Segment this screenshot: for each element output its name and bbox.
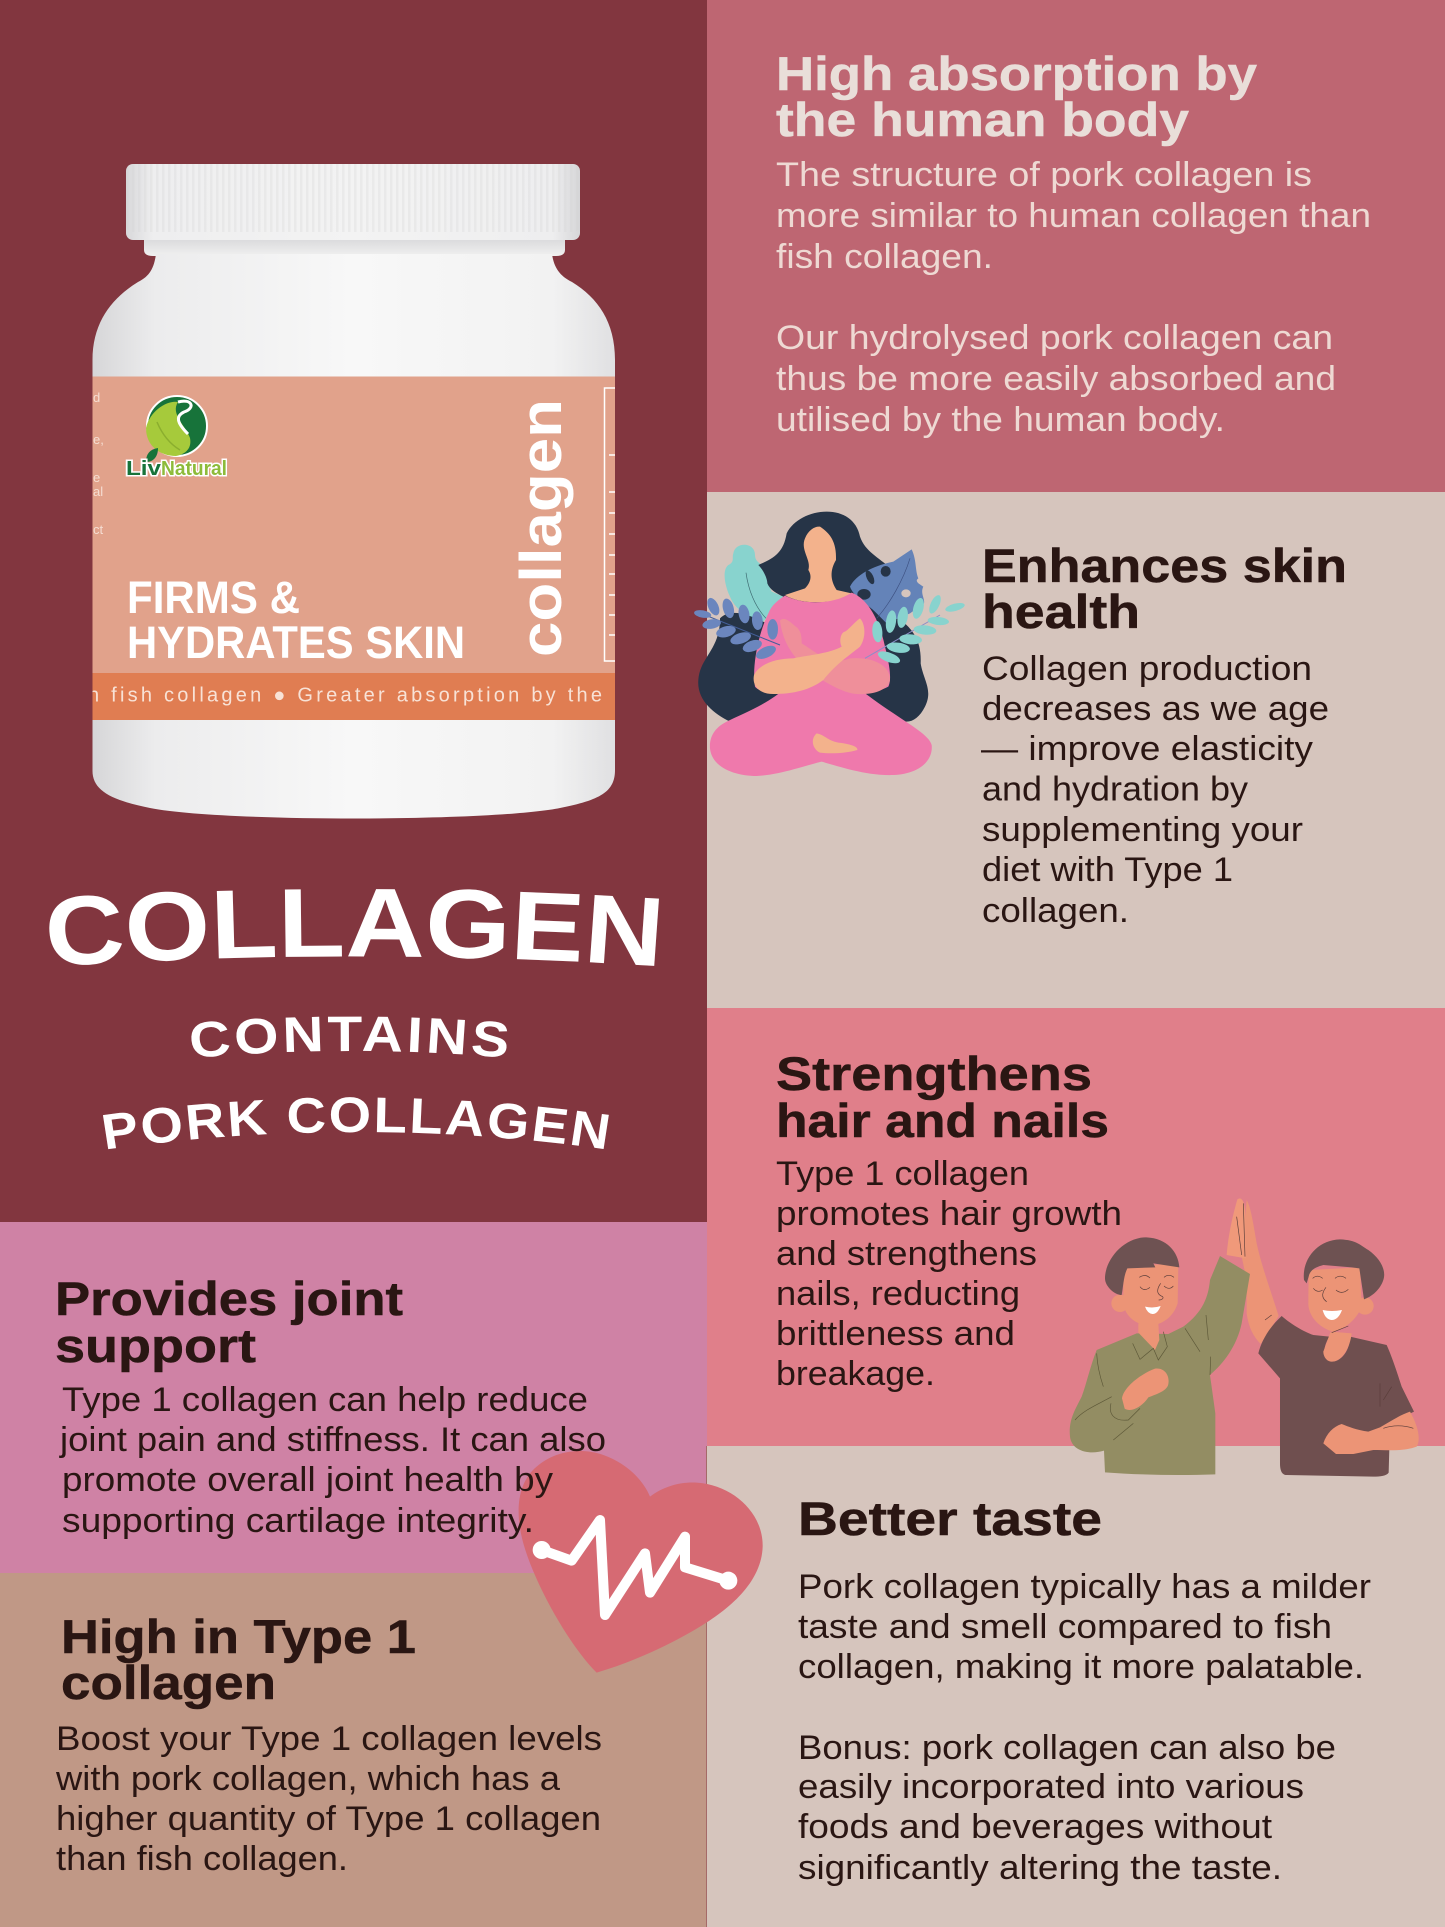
text: high absorption: The structure of pork collagen is — [776, 156, 1312, 194]
heading: hair and nails: Strengthens — [776, 1047, 1092, 1100]
text: hair and nails — [776, 1155, 1122, 1393]
legs — [710, 687, 932, 776]
text: better taste: Bonus: pork collagen can also be — [798, 1729, 1336, 1767]
text: better taste: significantly altering the taste. — [798, 1849, 1282, 1887]
clipped side label text: ct — [93, 522, 104, 537]
text: better taste — [798, 1568, 1371, 1887]
face and neck — [785, 527, 852, 602]
panel: better taste background — [707, 1446, 1445, 1927]
text: better taste: easily incorporated into various — [798, 1768, 1304, 1806]
heading: skin health: health — [982, 585, 1140, 638]
clipped side label text: e — [93, 470, 100, 485]
panel: absorption background — [707, 0, 1445, 492]
panel: product background — [0, 0, 707, 1222]
title: COLLAGEN: COLLAGEN — [49, 889, 659, 966]
logo: LivNatural — [126, 396, 227, 480]
blue sprig — [693, 596, 780, 662]
left man neck — [1138, 1323, 1159, 1350]
heading: joint support: Provides joint — [55, 1272, 403, 1325]
right man head — [1304, 1239, 1384, 1362]
jar lid — [126, 164, 580, 240]
text: hair and nails: breakage. — [776, 1355, 935, 1393]
label claim: HYDRATES SKIN — [127, 617, 465, 668]
label claim: FIRMS & — [127, 572, 300, 623]
left man head — [1105, 1237, 1179, 1326]
text: joint support: joint pain and stiffness. It can also — [59, 1421, 606, 1459]
jar body — [92, 254, 615, 818]
left man shirt creases — [1075, 1315, 1211, 1440]
heading: type 1 collagen — [61, 1610, 416, 1709]
front arm — [754, 618, 864, 694]
text: type 1 collagen — [55, 1720, 602, 1878]
teal leaf — [725, 545, 783, 622]
heading: type 1 collagen: collagen — [61, 1656, 276, 1709]
heading: joint support — [55, 1272, 403, 1372]
arm detail lines — [1237, 1203, 1413, 1428]
text: joint support: supporting cartilage integrity. — [62, 1502, 534, 1540]
right man forearm and hand — [1323, 1412, 1419, 1454]
text: joint support — [59, 1381, 606, 1540]
panel: type 1 collagen background — [0, 1573, 707, 1927]
right man shirt — [1258, 1316, 1414, 1477]
text: hair and nails: brittleness and — [776, 1315, 1015, 1353]
label claim — [127, 572, 465, 668]
panel: joint support background — [0, 1222, 707, 1573]
heading: type 1 collagen: High in Type 1 — [61, 1610, 416, 1663]
subtitle: PORK COLLAGEN: PORK COLLAGEN — [103, 1097, 609, 1150]
label colour band — [92, 673, 615, 720]
band text: n fish collagen ● Greater absorption by the — [88, 684, 602, 706]
heading: joint support: support — [55, 1319, 256, 1372]
logo: LivNatural: Liv — [126, 458, 162, 480]
panel: skin health background — [707, 492, 1445, 1008]
vertical label word: collagen — [509, 399, 574, 657]
text: high absorption: utilised by the human body. — [776, 401, 1225, 439]
teal sprig — [865, 593, 966, 666]
text: skin health: and hydration by — [982, 770, 1248, 808]
illustration: meditating woman — [693, 512, 966, 776]
jar label — [92, 376, 615, 674]
heading: better taste: Better taste — [798, 1492, 1102, 1545]
clipped side label text: al — [93, 484, 103, 499]
text: skin health: Collagen production — [982, 650, 1312, 688]
icon: heart with pulse — [519, 1451, 763, 1673]
right man raised arm — [1242, 1200, 1279, 1344]
clipped side label text: e, — [93, 432, 104, 447]
text: joint support: Type 1 collagen can help reduce — [62, 1381, 588, 1419]
text: skin health: diet with Type 1 — [982, 851, 1233, 889]
heading: high absorption — [776, 47, 1257, 146]
foot — [813, 733, 857, 753]
text: skin health: collagen. — [982, 892, 1129, 930]
heading: high absorption: High absorption by — [776, 47, 1257, 100]
text: better taste: taste and smell compared to fish — [798, 1608, 1332, 1646]
text: skin health: supplementing your — [982, 811, 1303, 849]
text: type 1 collagen: higher quantity of Type 1 collagen — [56, 1800, 601, 1838]
text: high absorption — [776, 156, 1371, 439]
text: joint support: promote overall joint health by — [62, 1461, 553, 1499]
logo: LivNatural: Natural — [161, 458, 227, 480]
text: hair and nails: and strengthens — [776, 1235, 1037, 1273]
back arm — [780, 619, 890, 694]
text: high absorption: more similar to human collagen than — [776, 197, 1371, 235]
blue leaf — [850, 549, 924, 623]
text: high absorption: thus be more easily absorbed and — [776, 360, 1336, 398]
text: skin health: — improve elasticity — [981, 730, 1313, 768]
text: skin health: decreases as we age — [982, 690, 1329, 728]
heading: skin health — [982, 539, 1347, 638]
heading: skin health: Enhances skin — [982, 539, 1347, 592]
product jar — [88, 164, 615, 818]
text: high absorption: Our hydrolysed pork collagen can — [776, 319, 1333, 357]
text: hair and nails: nails, reducting — [776, 1275, 1020, 1313]
panel: hair and nails background — [707, 1008, 1445, 1446]
text: skin health — [981, 650, 1329, 930]
heading: high absorption: the human body — [776, 93, 1189, 146]
text: hair and nails: promotes hair growth — [776, 1195, 1122, 1233]
nutrition box edge — [604, 388, 615, 661]
text: type 1 collagen: with pork collagen, which has a — [55, 1760, 560, 1798]
subtitle: CONTAINS: CONTAINS — [191, 1016, 508, 1057]
left man hand on chest — [1122, 1369, 1169, 1410]
heading: hair and nails — [776, 1047, 1109, 1147]
text: high absorption: fish collagen. — [776, 238, 993, 276]
torso — [754, 593, 890, 694]
text: hair and nails: Type 1 collagen — [776, 1155, 1029, 1193]
left man raised hand — [1227, 1198, 1246, 1258]
clipped side label text: d — [93, 390, 100, 405]
text: better taste: foods and beverages without — [798, 1808, 1273, 1846]
jar neck — [144, 236, 565, 256]
clipped side label text — [93, 390, 104, 537]
leaf veins and holes — [746, 558, 911, 618]
text: better taste: collagen, making it more palatable. — [798, 1648, 1364, 1686]
illustration: two men high-five — [1070, 1198, 1419, 1477]
hair — [698, 512, 928, 722]
text: type 1 collagen: than fish collagen. — [56, 1840, 348, 1878]
text: better taste: Pork collagen typically has a milder — [798, 1568, 1371, 1606]
heading: hair and nails: hair and nails — [776, 1094, 1109, 1147]
left man shirt — [1070, 1256, 1250, 1475]
text: type 1 collagen: Boost your Type 1 collagen levels — [56, 1720, 602, 1758]
